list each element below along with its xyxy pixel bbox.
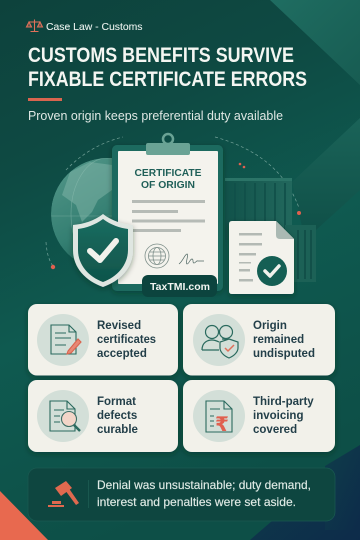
brand pill: TaxTMI.com xyxy=(150,281,210,293)
verdict text: Denial was unsustainable; duty demand, xyxy=(97,478,311,492)
conclusion banner xyxy=(28,468,335,521)
signature xyxy=(179,254,204,264)
globe xyxy=(51,158,112,259)
label xyxy=(97,396,138,436)
seal xyxy=(145,244,169,268)
title: FIXABLE CERTIFICATE ERRORS xyxy=(28,67,307,91)
label: invoicing xyxy=(253,410,303,422)
clipboard xyxy=(112,134,223,291)
coral corner triangle xyxy=(0,491,48,540)
certificate heading xyxy=(134,167,202,191)
text lines xyxy=(132,200,205,232)
dashed orbit xyxy=(46,137,299,266)
icon: invoice with rupee xyxy=(206,401,232,432)
certificate heading: CERTIFICATE xyxy=(134,167,202,179)
approved document xyxy=(229,221,294,294)
verdict text xyxy=(97,478,311,509)
title: CUSTOMS BENEFITS SURVIVE xyxy=(28,43,294,67)
label: curable xyxy=(97,424,138,436)
check badge xyxy=(257,256,287,286)
label: defects xyxy=(97,410,137,422)
subtitle: Proven origin keeps preferential duty available xyxy=(28,109,283,123)
divider xyxy=(87,480,90,508)
icon: gavel xyxy=(48,481,79,507)
label: Origin xyxy=(253,320,287,332)
title xyxy=(28,43,307,91)
accent rule xyxy=(28,98,62,101)
certificate heading: OF ORIGIN xyxy=(141,179,195,191)
icon: scales xyxy=(26,20,42,32)
icon: document with pen xyxy=(51,325,81,354)
label xyxy=(253,396,314,436)
verdict text: interest and penalties were set aside. xyxy=(97,495,296,509)
red dots xyxy=(51,163,301,269)
card: origin undisputed xyxy=(183,304,335,376)
header xyxy=(26,20,307,123)
shipping containers xyxy=(225,178,316,282)
label: certificates xyxy=(97,334,156,346)
icon: document with magnifier xyxy=(50,401,80,431)
label: accepted xyxy=(97,348,147,360)
label xyxy=(253,320,315,360)
kicker: Case Law - Customs xyxy=(46,22,142,33)
label: undisputed xyxy=(253,348,315,360)
label: covered xyxy=(253,424,297,436)
brand pill xyxy=(142,275,217,297)
clip xyxy=(146,134,190,155)
card: third-party invoicing xyxy=(183,380,335,452)
card: format defects xyxy=(28,380,178,452)
label: Third-party xyxy=(253,396,314,408)
card: third-party invoicing: ₹ xyxy=(215,412,229,436)
hero illustration xyxy=(46,134,316,297)
label xyxy=(97,320,156,360)
label: remained xyxy=(253,334,304,346)
card: revised certificates xyxy=(28,304,178,376)
label: Revised xyxy=(97,320,141,332)
icon: people with shield xyxy=(202,326,238,358)
shield xyxy=(73,214,133,287)
label: Format xyxy=(97,396,136,408)
